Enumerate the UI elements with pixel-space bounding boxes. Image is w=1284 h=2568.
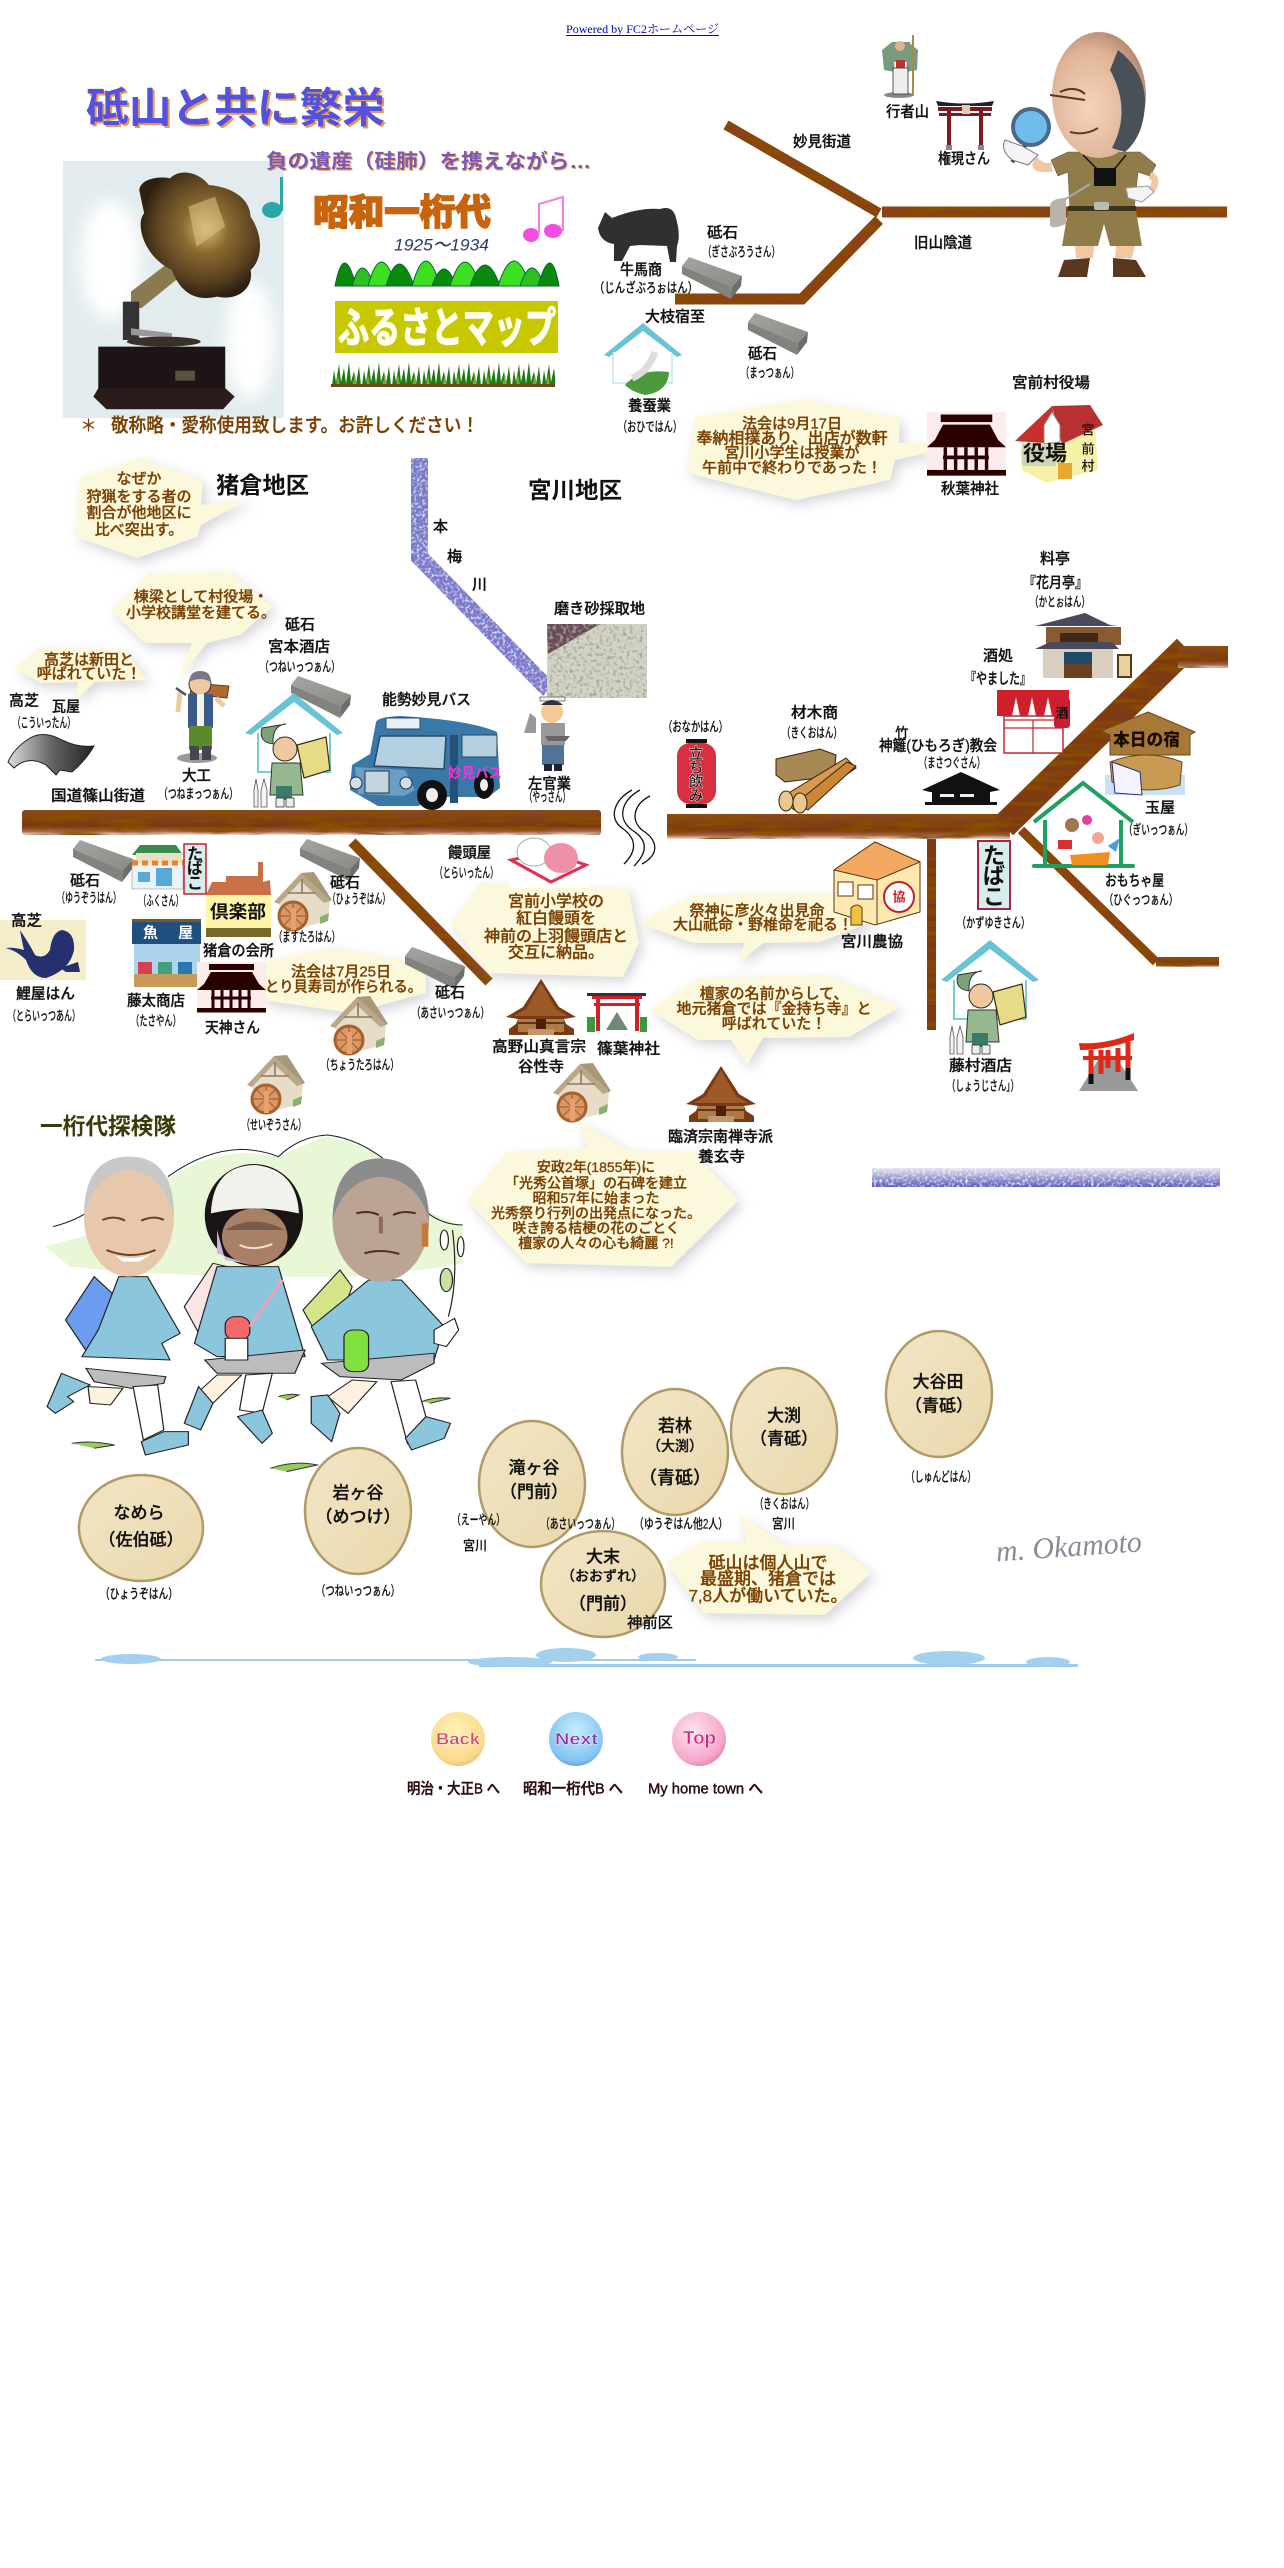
labels: map place names: （じんざぶろぉはん） (594, 280, 698, 296)
callout: memorial service sept: 宮川小学生は授業が (724, 444, 860, 462)
labels: map place names: （あさいっつぁん） (412, 1006, 489, 1020)
callout: master carpenter: 小学校講堂を建てる。 (126, 604, 276, 622)
labels: map place names: 玉屋 (1145, 800, 1175, 816)
labels: map place names: （こういったん） (13, 716, 75, 730)
callout: whetstone mountains: 最盛期、猪倉では (700, 1570, 836, 1588)
callout: memorial service sept (687, 399, 927, 500)
roads: upper junction (675, 125, 1227, 299)
icon: village office (1015, 405, 1103, 483)
labels: map place names: 梅 (447, 548, 462, 566)
link: powered by: Powered by FC2ホームページ (566, 22, 719, 36)
icon: village office: 前 (1081, 442, 1095, 456)
oval: takigatani: （門前） (500, 1482, 568, 1502)
subtitle: 負の遺産（硅肺）を携えながら… (266, 149, 591, 173)
oval: namera (79, 1475, 203, 1581)
icon: village office: 村 (1081, 458, 1095, 474)
labels: map place names: 材木商 (791, 704, 838, 722)
face: left (84, 1157, 174, 1277)
icon: whetstone giksaburo (682, 257, 742, 299)
icon: torii gongen (936, 101, 994, 150)
labels: map place names: （えーやん） (452, 1512, 505, 1528)
callout: hunting: 割合が他地区に (86, 504, 192, 522)
icon: fox torii tunnel (1079, 1033, 1138, 1091)
icon: hotel sign and tub (1101, 712, 1195, 795)
labels: map place names: 砥石 (435, 984, 465, 1002)
labels: map place names: 藤村酒店 (949, 1058, 1012, 1074)
middle kid (184, 1263, 246, 1337)
subtitle: 負の遺産（硅肺）を携えながら… (267, 150, 592, 174)
note: honorifics: ＊ (80, 416, 97, 436)
icon: whetstone miyamoto (291, 676, 351, 718)
labels: map place names: 瓦屋 (52, 698, 80, 716)
river: hon-ume (420, 458, 1220, 1187)
labels: map place names (8, 104, 1193, 1632)
labels: map place names: （とらいっつあん） (8, 1008, 80, 1024)
icon: lantern tachinomi: み (688, 788, 704, 804)
icon: hayama torii (586, 992, 647, 1033)
labels: map place names: （きくおはん） (755, 1496, 814, 1512)
callout: memorial service sept: 午前中で終わりであった！ (702, 458, 882, 476)
callout: master carpenter: 棟梁として村役場・ (134, 588, 268, 606)
callout: rich temple (650, 975, 900, 1065)
callout: takashiba: 高芝は新田と (44, 652, 134, 668)
icon: red white manju (510, 838, 588, 888)
labels: map place names: 砥石 (707, 224, 738, 242)
labels: map place names: （かとぉはん） (1030, 594, 1090, 610)
callout: hunting (76, 458, 250, 558)
labels: map place names: （つねいっつぁん） (316, 1584, 400, 1598)
icon: watermill monument (553, 1063, 611, 1121)
button: back: Back (436, 1730, 481, 1748)
labels: map place names: 秋葉神社 (941, 480, 999, 498)
oval: osue (541, 1531, 665, 1637)
callout: whetstone mountains (666, 1513, 871, 1615)
button: top: Top (683, 1728, 716, 1748)
icon: fish shop: 魚屋 (143, 924, 193, 942)
labels: map place names: 大枝宿至 (645, 308, 705, 326)
left kid (66, 1277, 123, 1357)
icon: whetstone asai (405, 947, 465, 989)
labels: map place names: 宮前村役場 (1012, 374, 1090, 392)
labels: map place names: （きくおはん） (782, 726, 842, 740)
callout: master carpenter (111, 572, 276, 677)
labels: map place names: 高芝 (11, 912, 42, 930)
clouds and horizon lines (95, 1648, 1078, 1667)
oval: osue: （おおずれ） (561, 1568, 645, 1584)
callout: memorial service sept: 奉納相撲あり、出店が数軒 (696, 428, 888, 448)
photo: polishing sand (547, 624, 647, 698)
oval: otanida: 大谷田 (912, 1372, 964, 1392)
oval: wakabayashi: （大渕） (647, 1438, 703, 1454)
labels: map place names: 鯉屋はん (16, 986, 75, 1002)
labels: map place names: 国道篠山街道 (51, 788, 145, 804)
callout: school manju: 宮前小学校の (508, 892, 604, 910)
labels: map place names: 牛馬商 (620, 262, 662, 278)
icon: bonnet bus: 妙見バス (448, 765, 502, 781)
icon: tobacco sign east (978, 841, 1010, 910)
labels: map place names: 養蚕業 (628, 398, 671, 414)
face: middle (205, 1164, 303, 1266)
callout: school manju (451, 883, 639, 977)
icon: akiba shrine (927, 412, 1006, 476)
icon: watermill seizo (247, 1055, 305, 1113)
button: top (672, 1712, 726, 1766)
right kid (303, 1270, 352, 1353)
icon: koi (0, 920, 86, 980)
labels: map place names: 篠葉神社 (597, 1040, 660, 1058)
labels: map place names: 宮川地区 (528, 477, 622, 503)
labels: map place names: （せいぞうさん） (242, 1118, 306, 1132)
icon: pink music notes (523, 197, 563, 242)
labels: map place names: （しょうじさん」） (947, 1078, 1019, 1094)
labels: map place names: 宮本酒店 (268, 638, 330, 656)
labels: map place names: 高野山真言宗 (492, 1038, 586, 1056)
nav labels: My home town へ (648, 1780, 763, 1798)
icon: squiggle steam (614, 790, 655, 866)
labels: map place names: 砥石 (748, 346, 777, 362)
callout: mitsuhide monument: 光秀祭り行列の出発点になった。 (491, 1205, 701, 1221)
labels: map place names: 磨き砂採取地 (554, 600, 645, 618)
icon: roof tile (8, 734, 94, 775)
icon: club house (206, 862, 271, 937)
heading: expedition team: 一桁代探検隊 (40, 1113, 176, 1139)
title: 砥山と共に繁栄 (86, 84, 385, 132)
labels: map place names: 養玄寺 (698, 1148, 745, 1166)
icon: lantern tachinomi: ち (688, 760, 704, 776)
labels: map place names: （ひょうぞはん） (100, 1586, 178, 1602)
labels: map place names: 権現さん (938, 150, 990, 168)
labels: map place names: （ゆうぞうはん） (57, 890, 121, 906)
figure: plasterer (524, 697, 570, 771)
icon: tobacco sign east: た (983, 844, 1005, 868)
icon: toy house (1034, 783, 1133, 866)
labels: map place names: 酒処 (983, 648, 1013, 664)
nav labels (407, 1780, 763, 1798)
figure: carpenter (176, 671, 229, 763)
oval: wakabayashi: 若林 (658, 1416, 692, 1436)
labels: map place names: 饅頭屋 (448, 844, 491, 862)
icon: cow (598, 208, 679, 262)
labels: map place names: （おなかはん） (663, 720, 728, 734)
labels: map place names: 高芝 (9, 692, 39, 710)
callout: mitsuhide monument (467, 1120, 739, 1267)
callout: memorial service july: 法会は7月25日 (291, 964, 391, 980)
oval: obuchi (731, 1368, 837, 1494)
labels: map place names: （つねまっつぁん） (159, 786, 238, 802)
oval: osue: （門前） (569, 1594, 637, 1614)
labels: map place names: （ちょうたろはん） (321, 1058, 399, 1072)
labels: map place names: （ひぐっつぁん） (1104, 892, 1178, 908)
callout: hunting: なぜか (116, 470, 162, 488)
callout: mitsuhide monument: 檀家の人々の心も綺麗 ?! (518, 1235, 674, 1251)
labels: map place names: （しゅんどはん） (906, 1470, 976, 1484)
figure: sake seller (245, 693, 343, 807)
signature: m. Okamoto (995, 1525, 1143, 1568)
labels: map place names: 谷性寺 (518, 1058, 564, 1076)
button: back (431, 1712, 485, 1766)
labels: map place names: 行者山 (886, 104, 929, 120)
oval: otanida (886, 1331, 992, 1457)
labels: map place names: 料亭 (1040, 550, 1070, 568)
callout: shrine gods: 大山祇命・野椎命を祀る！ (673, 916, 853, 934)
callout: mitsuhide monument: 安政2年(1855年)に (537, 1159, 655, 1175)
callout: mitsuhide monument: 咲き誇る桔梗の花のごとく (512, 1220, 680, 1236)
roads: main streets (22, 646, 1228, 1030)
labels: map place names: （たさやん） (131, 1014, 181, 1028)
oval: takigatani (479, 1421, 585, 1547)
oval: namera: （佐伯砥） (98, 1530, 184, 1550)
callout: takashiba (14, 647, 147, 702)
labels: map place names: （おひではん） (618, 420, 682, 434)
callout: school manju: 紅白饅頭を (516, 910, 596, 928)
banner: furusato map (335, 301, 558, 353)
callout: whetstone mountains: 砥山は個人山で (708, 1554, 828, 1572)
labels: map place names: 宮川 (463, 1538, 487, 1554)
oval: iwagatani: （めつけ） (316, 1508, 400, 1526)
callout: shrine gods (639, 893, 870, 965)
callout: memorial service sept: 法会は9月17日 (742, 416, 842, 432)
icon: tree row (335, 261, 559, 286)
icon: tobacco sign east: こ (983, 884, 1005, 910)
callout: school manju: 神前の上羽饅頭店と (484, 928, 628, 946)
callout: rich temple: 呼ばれていた！ (722, 1016, 826, 1032)
labels: map place names: 能勢妙見バス (382, 692, 471, 708)
oval: namera: なめら (114, 1504, 164, 1522)
labels: map place names: 妙見街道 (793, 134, 851, 150)
callout: memorial service july (262, 947, 426, 1013)
oval: wakabayashi (622, 1389, 728, 1515)
labels: map place names: 竹 (895, 726, 909, 740)
labels: map place names: 宮川農協 (841, 934, 903, 950)
callout: takashiba: 呼ばれていた！ (37, 666, 141, 682)
labels: map place names: 宮川 (772, 1516, 795, 1532)
labels: map place names: 神前区 (627, 1614, 673, 1632)
oval: takigatani: 滝ヶ谷 (508, 1458, 560, 1478)
icon: grass strip (331, 362, 555, 387)
icon: club house: 倶楽部 (210, 902, 266, 922)
years: 1925〜1934 (394, 236, 489, 254)
oval: iwagatani (305, 1448, 411, 1574)
labels: map place names: 『やました』 (965, 670, 1031, 688)
icon: village office: 役場 (1023, 442, 1067, 466)
icon: sake shop (997, 690, 1070, 753)
labels: map place names: （ぎいっつぁん） (1124, 822, 1193, 838)
icon: tobacco sign west (184, 844, 206, 894)
icon: JA office building (834, 842, 920, 925)
icon: fish shop (132, 919, 201, 987)
icon: lantern tachinomi (677, 739, 716, 808)
button: next (549, 1712, 603, 1766)
icon: candy shop (132, 845, 183, 889)
labels: map place names: 猪倉地区 (216, 472, 309, 498)
labels: map place names: （あさいっつぁん） (541, 1516, 620, 1532)
labels: map place names: （ひょうぞはん） (328, 892, 390, 906)
icon: lantern tachinomi: 立 (688, 746, 704, 762)
icon: koyasan temple (506, 979, 576, 1035)
icon: yogenji temple (686, 1066, 756, 1122)
callout: school manju: 交互に納品。 (508, 944, 604, 962)
note: honorifics: 敬称略・愛称使用致します。お許しください！ (111, 414, 479, 436)
labels: map place names: （まさつぐさん） (919, 756, 985, 770)
labels: map place names: （ふくさん） (139, 894, 183, 908)
title: 砥山と共に繁栄 (88, 86, 387, 134)
labels: map place names: 臨済宗南禅寺派 (668, 1128, 773, 1146)
labels: map place names: （かずゆきさん） (957, 916, 1030, 930)
icon: village office: 宮 (1081, 422, 1095, 438)
icon: tobacco sign east: ば (983, 864, 1005, 888)
oval: obuchi: （青砥） (750, 1430, 818, 1448)
labels: map place names: 天神さん (205, 1020, 260, 1036)
labels: map place names: （ゆうぞはん他2人） (634, 1516, 728, 1532)
labels: map place names: 『花月亭』 (1023, 574, 1088, 592)
icon: whetstone matsu (748, 313, 808, 355)
labels: map place names: （とらいったん） (435, 866, 498, 880)
icon: whetstone hyozo (300, 839, 360, 881)
labels: map place names: 神籬(ひもろぎ)教会 (879, 736, 997, 754)
icon: JA office building: 協 (892, 890, 906, 904)
nav labels: 明治・大正B へ (407, 1780, 500, 1798)
icon: whetstone west (73, 840, 133, 882)
callout: hunting: 狩猟をする者の (86, 488, 192, 506)
nav labels: 昭和一桁代B へ (523, 1780, 623, 1798)
labels: map place names: 左官業 (528, 776, 571, 792)
heading: showa decade: 昭和一桁代 (313, 192, 491, 232)
labels: map place names: （つねいっつぁん） (260, 660, 340, 674)
icon: ryotei building (1035, 613, 1131, 678)
labels: map place names: 砥石 (70, 872, 100, 890)
labels: map place names: おもちゃ屋 (1105, 872, 1164, 890)
labels: map place names: 本 (433, 518, 448, 536)
labels: map place names: （ますたろはん） (274, 930, 340, 944)
labels: map place names: （まっつぁん） (741, 366, 799, 380)
gramophone picture (63, 161, 284, 418)
labels: map place names: 大工 (182, 768, 211, 784)
icon: tenjin shrine (197, 962, 266, 1012)
callout: hunting: 比べ突出す。 (95, 522, 183, 538)
labels: map place names: 砥石 (285, 616, 315, 634)
callout: mitsuhide monument: 昭和57年に始まった (532, 1190, 660, 1206)
figure: explorer (1004, 32, 1156, 277)
icon: shugenja (882, 35, 918, 98)
icon: lantern tachinomi: 飲 (688, 772, 704, 790)
icon: hotel sign and tub: 本日の宿 (1113, 730, 1180, 750)
button: next: Next (555, 1730, 598, 1748)
face: right (333, 1158, 429, 1282)
callout: rich temple: 地元猪倉では『金持ち寺』と (676, 1000, 872, 1018)
icon: teal music note (262, 177, 283, 218)
icon: tobacco sign west: た (187, 846, 203, 864)
icon: timber (776, 749, 856, 813)
icon: watermill masutaro (274, 872, 332, 930)
ovals: whetstone mountains (79, 1331, 992, 1637)
labels: map place names: 砥石 (330, 874, 360, 892)
icon: himorogi church (922, 772, 1000, 805)
callout: memorial service july: とり貝寿司が作られる。 (265, 978, 422, 996)
labels: map place names: 旧山陰道 (914, 234, 972, 252)
labels: map place names: （ぎさぶろうさん） (703, 244, 780, 260)
oval: obuchi: 大渕 (767, 1406, 801, 1426)
oval: wakabayashi: （青砥） (639, 1468, 711, 1488)
icon: tobacco sign west: こ (187, 876, 203, 892)
callout: whetstone mountains: 7,8人が働いていた。 (688, 1586, 848, 1606)
oval: otanida: （青砥） (905, 1396, 973, 1416)
labels: map place names: 川 (472, 576, 487, 594)
figure: explorer kids illustration (45, 1135, 464, 1472)
oval: osue: 大末 (586, 1548, 620, 1566)
labels: map place names: 猪倉の会所 (203, 942, 274, 960)
icon: sake shop: 酒 (1055, 706, 1069, 720)
oval: iwagatani: 岩ヶ谷 (332, 1484, 384, 1502)
icon: sericulture house (604, 323, 682, 395)
labels: map place names: （やっさん） (525, 790, 570, 804)
callout: shrine gods: 祭神に彦火々出見命 (689, 902, 825, 920)
icon: watermill chotaro (330, 996, 388, 1054)
icon: tobacco sign west: ば (187, 860, 203, 878)
figure: fujimura sake seller (941, 940, 1039, 1054)
banner: furusato map: ふるさとマップ (338, 304, 556, 352)
labels: map place names: 藤太商店 (127, 992, 185, 1010)
callout: rich temple: 檀家の名前からして、 (700, 984, 848, 1002)
icon: bonnet bus (350, 716, 502, 810)
callout: mitsuhide monument: 「光秀公首塚」の石碑を建立 (505, 1175, 687, 1191)
